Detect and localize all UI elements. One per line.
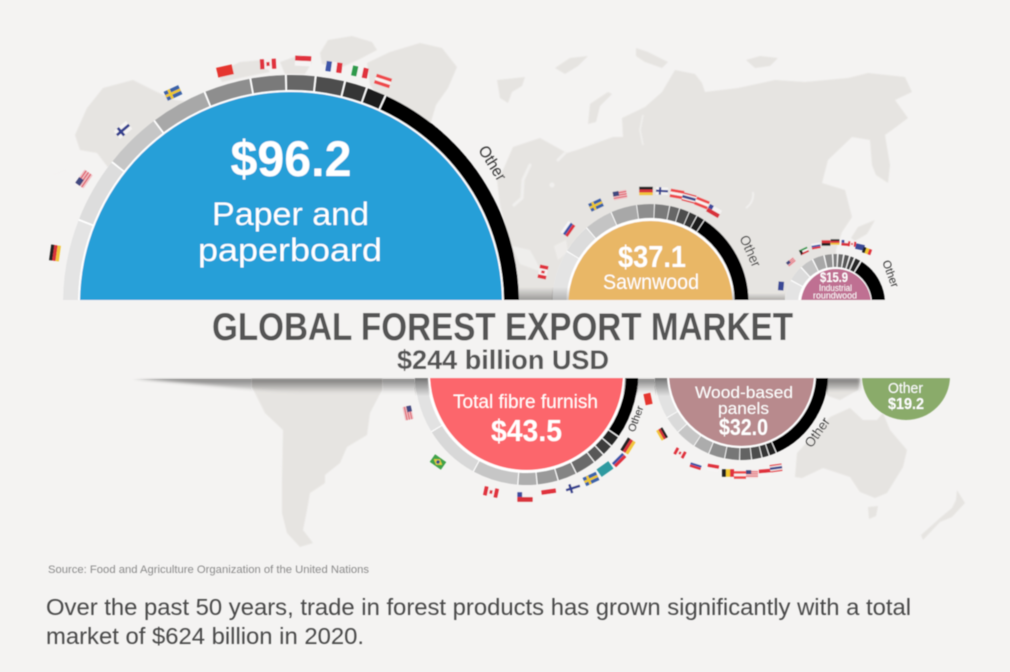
icon: flag Chile [706, 204, 722, 218]
panel: other [862, 378, 950, 421]
icon: flag Germany [620, 438, 636, 454]
flags: roundwood exporters [778, 239, 872, 291]
value: paper: $96.2 [230, 131, 352, 187]
icon: flag Belgium [722, 469, 734, 477]
segmented ring: paper exporters [63, 74, 520, 301]
label: panels: panels [718, 399, 769, 418]
icon: flag Germany [639, 187, 653, 195]
label: other: Other [888, 380, 923, 397]
icon: flag Indonesia [643, 393, 653, 405]
icon: flag Germany [656, 427, 668, 441]
icon: flag USA [75, 170, 93, 188]
icon: flag Sweden [164, 85, 182, 101]
label: paper and: Paper and [212, 196, 369, 232]
panel: total fibre furnish [402, 378, 644, 503]
segmented ring: roundwood exporters [790, 254, 886, 301]
icon: flag USA [402, 405, 414, 421]
label: industrial: Industrial [819, 283, 852, 293]
icon: flag Canada [848, 241, 856, 247]
icon: flag Kazakhstan [597, 461, 613, 477]
icon: flag USA [613, 190, 627, 200]
icon: flag Sweden [588, 198, 604, 212]
title band [0, 300, 1010, 378]
map inland seas [512, 115, 753, 272]
band shadow above right gap [748, 293, 785, 300]
icon: flag Russia [610, 451, 626, 467]
icon: flag Poland [759, 469, 771, 477]
icon: flag Thailand [770, 463, 782, 473]
icon: flag Canada [537, 264, 549, 280]
icon: flag Malaysia [746, 470, 758, 478]
label: other: Other [737, 233, 765, 270]
panel: paper and paperboard [48, 54, 520, 301]
label: sawnwood: Sawnwood [603, 271, 699, 294]
value: roundwood: $15.9 [820, 269, 848, 285]
icon: flag Germany [49, 245, 61, 261]
segmented ring: sawnwood exporters [552, 204, 749, 300]
label: other: Other [475, 143, 509, 185]
panel: industrial roundwood [777, 238, 898, 301]
flags: fibre exporters [402, 405, 636, 502]
icon: flag Brazil [430, 454, 446, 470]
icon: flag Russia [561, 221, 575, 237]
value: sawnwood: $37.1 [618, 239, 686, 274]
icon: flag Finland [656, 187, 668, 195]
world map [43, 36, 965, 547]
icon: flag Canada [483, 486, 499, 498]
icon: flag Austria [734, 471, 746, 479]
flags: paper exporters [49, 56, 392, 261]
icon: flag Thailand [681, 192, 697, 204]
icon: flag Finland [114, 121, 132, 139]
description text [46, 594, 911, 649]
band shadow below [133, 378, 860, 393]
label: roundwood: roundwood [813, 290, 857, 300]
label: other: Other [879, 259, 900, 289]
icon: flag Poland [541, 489, 557, 499]
icon: flag Russia [690, 460, 702, 470]
icon: flag Chile [841, 240, 851, 246]
label: paperboard: paperboard [198, 232, 382, 268]
description text: Over the past 50 years, trade in forest products has grown significantly with a total [46, 594, 911, 620]
icon: flag Germany [831, 239, 839, 245]
icon: flag Russia [811, 243, 821, 249]
label: other: Other [802, 414, 833, 450]
segmented ring: fibre exporters [414, 378, 639, 486]
panel: sawnwood [537, 186, 760, 300]
value: panels: $32.0 [719, 414, 768, 440]
icon: flag Chile [517, 492, 533, 502]
icon: flag Belgium [862, 247, 872, 255]
icon: flag Australia [855, 243, 865, 251]
label: total fibre furnish: Total fibre furnish [453, 392, 598, 413]
subtitle: $244 billion USD [397, 345, 609, 375]
source note: Source: Food and Agriculture Organization of the United Nations [48, 564, 370, 576]
icon: flag Finland [565, 481, 581, 495]
icon: flag Italy [351, 65, 369, 79]
value: fibre: $43.5 [491, 413, 562, 448]
icon: flag Canada [260, 59, 276, 69]
icon: flag Sweden [583, 472, 599, 486]
description text: market of $624 billion in 2020. [46, 623, 364, 649]
panel: wood-based panels [642, 378, 830, 480]
band shadow above left gap [519, 287, 554, 300]
title: GLOBAL FOREST EXPORT MARKET [212, 306, 793, 349]
icon: flag Austria [670, 189, 684, 199]
icon: flag China [216, 64, 234, 78]
icon: flag Indonesia [295, 56, 311, 66]
label: other: Other [626, 404, 647, 434]
icon: flag Austria [694, 197, 710, 209]
icon: flag Kuwait [799, 247, 809, 255]
value: other: $19.2 [888, 396, 924, 413]
flags: panel exporters [643, 393, 782, 479]
semicircle: other [862, 378, 950, 421]
segmented ring: panel exporters [654, 378, 828, 461]
icon: flag USA [786, 257, 796, 267]
icon: flag France [325, 61, 343, 73]
icon: flag Poland [707, 464, 719, 472]
icon: flag Australia [778, 281, 784, 291]
icon: flag Angola [822, 240, 830, 246]
icon: flag Austria [374, 74, 392, 88]
icon: flag Canada [673, 447, 687, 459]
flags: sawnwood exporters [537, 187, 722, 280]
label: wood-based: Wood-based [695, 383, 793, 402]
